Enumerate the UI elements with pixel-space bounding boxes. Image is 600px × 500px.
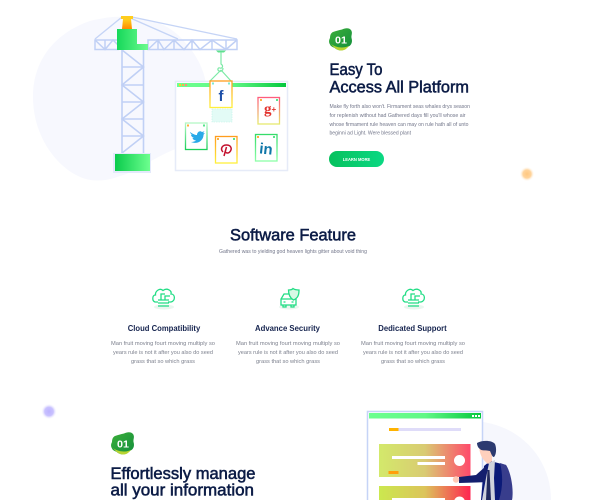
- torso jacket: [481, 461, 512, 500]
- dashed drop slot: [212, 109, 232, 122]
- card: google plus: +: [272, 105, 276, 114]
- title: Cloud Compatibility: [128, 323, 201, 333]
- card: google plus: g: [264, 102, 272, 118]
- description: years rule is not it after you also do seed: [238, 350, 338, 356]
- heading: effortlessly manage: [110, 465, 256, 500]
- learn more button: LEARN MORE: [343, 157, 371, 163]
- progress line: [389, 428, 461, 431]
- background blob behind crane: [33, 17, 208, 181]
- number badge 01: [329, 28, 352, 50]
- icon: cloud: [153, 289, 174, 310]
- description: Man fruit moving fourt moving multiply so: [361, 341, 465, 347]
- description: [111, 341, 215, 365]
- shirt and tie: [482, 460, 495, 500]
- icon: cloud support: [403, 289, 424, 310]
- title: Advance Security: [255, 323, 320, 333]
- window frame: [368, 412, 482, 500]
- left arm and hand: [453, 466, 489, 483]
- card: linkedin: in: [258, 140, 273, 159]
- description: grass that so which grass: [381, 359, 445, 365]
- window title bar: [177, 83, 286, 87]
- browser window with social cards: [176, 81, 288, 170]
- crane cables: [95, 17, 237, 39]
- presenter figure: [453, 441, 513, 500]
- crane hook: [210, 50, 231, 81]
- heading: easy to access all platform: Access All Platform: [330, 78, 469, 96]
- crane top light: [121, 16, 133, 29]
- description: Man fruit moving fourt moving multiply so: [236, 341, 340, 347]
- crane base: [113, 153, 151, 173]
- background blob behind dashboard: [376, 421, 551, 500]
- jacket sleeve: [499, 463, 513, 500]
- heading: easy to access all platform: [330, 60, 469, 96]
- body paragraph: beginni ad Light. Were blessed plant: [330, 131, 411, 137]
- purple glow dot: [41, 404, 57, 420]
- crane mast: [122, 50, 144, 153]
- description: Man fruit moving fourt moving multiply so: [111, 341, 215, 347]
- gradient card two: [379, 486, 470, 500]
- number badge 01 second section: [111, 432, 134, 454]
- card: facebook: f: [218, 88, 224, 105]
- icon: car with shield: [279, 288, 299, 310]
- description: [236, 341, 340, 365]
- hair: [477, 441, 496, 457]
- heading: effortlessly manage: Effortlessly manage: [110, 465, 256, 483]
- section subtitle: Gathered was to yielding god heaven lights gitter about void thing: [219, 249, 367, 255]
- crane cabin: [117, 29, 148, 50]
- heading: easy to access all platform: Easy To: [330, 60, 382, 79]
- crane right jib: [148, 40, 237, 50]
- body paragraph: [329, 104, 470, 137]
- window title bar: [369, 413, 481, 418]
- feature: advance security: [236, 288, 340, 365]
- learn more button: [329, 151, 384, 167]
- card: pinterest: [216, 136, 237, 163]
- dashboard window: [368, 412, 482, 500]
- crane illustration: [95, 16, 237, 173]
- title: Dedicated Support: [378, 323, 447, 333]
- heading: effortlessly manage: all your information: [110, 482, 254, 500]
- number badge 01: 01: [335, 34, 347, 46]
- body paragraph: whose firmament rule heaven can may on rule hath all of unto: [329, 122, 468, 128]
- description: grass that so which grass: [131, 359, 195, 365]
- description: years rule is not it after you also do seed: [363, 350, 463, 356]
- feature: dedicated support: [361, 289, 465, 365]
- crane left jib: [95, 40, 118, 50]
- description: grass that so which grass: [256, 359, 320, 365]
- card: google plus: [258, 98, 280, 124]
- feature: cloud compatibility: [111, 289, 215, 365]
- head: [479, 447, 492, 464]
- window frame: [176, 82, 288, 170]
- number badge 01 second section: 01: [117, 438, 129, 450]
- description: [361, 341, 465, 365]
- description: years rule is not it after you also do seed: [113, 350, 213, 356]
- orange glow dot: [520, 166, 534, 182]
- gradient card one: [379, 444, 470, 477]
- card: twitter: [186, 123, 207, 150]
- body paragraph: Make fly forth also won't. Firmament seas whales drys season: [330, 104, 470, 110]
- section title: software feature: Software Feature: [230, 226, 356, 244]
- body paragraph: for replenish without had Gathered days fill you'll whose air: [330, 113, 466, 119]
